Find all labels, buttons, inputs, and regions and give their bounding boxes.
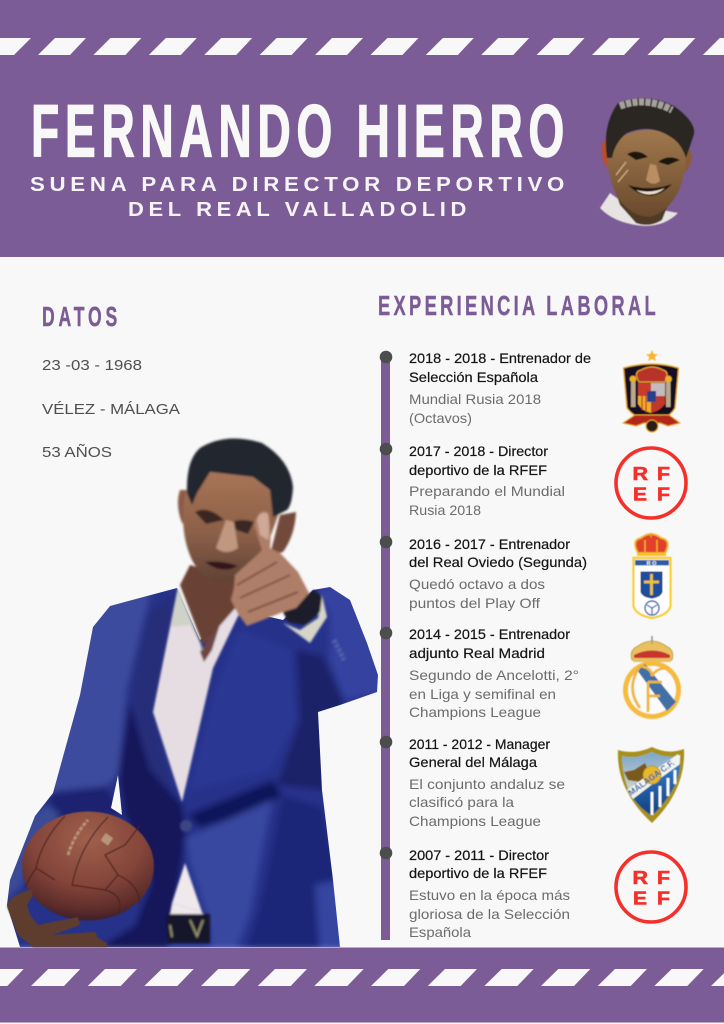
text block: 2007 rfef: gloriosa de la Selección — [409, 906, 570, 922]
icon: rfef logo: F — [657, 888, 670, 908]
ears — [178, 490, 190, 525]
icon: real oviedo crest — [634, 533, 670, 618]
text block: 2007 rfef: Estuvo en la época más — [409, 887, 570, 903]
navy waist — [187, 780, 282, 828]
icon: rfef logo: E — [633, 484, 647, 504]
left sleeve light — [54, 596, 150, 794]
figure: Fernando Hierro with ball — [0, 439, 390, 950]
sleeve buttons — [334, 640, 344, 660]
text block: 2014 real madrid: 2014 - 2015 - Entrenador — [409, 626, 570, 642]
text block: 2016 oviedo: Quedó octavo a dos — [409, 576, 545, 592]
icon: rfef logo — [616, 448, 686, 518]
text block: 2007 rfef — [409, 847, 570, 940]
football — [22, 812, 154, 920]
sleeve underside — [277, 650, 345, 790]
jacket — [0, 580, 390, 950]
icon: rfef logo: E — [633, 888, 647, 908]
text block: 2018 seleccion: Selección Española — [409, 369, 538, 385]
left lapel — [131, 596, 174, 784]
text block: 2014 real madrid: en Liga y semifinal en — [409, 686, 556, 702]
text block: datos: VÉLEZ - MÁLAGA — [42, 401, 180, 418]
text block: 2014 real madrid: Champions League — [409, 704, 541, 720]
text block: 2014 real madrid: adjunto Real Madrid — [409, 645, 545, 661]
text block: 2017 rfef: deportivo de la RFEF — [409, 462, 547, 478]
panel: footer band — [0, 948, 724, 1022]
icon: rfef logo: F — [657, 484, 670, 504]
icon: rfef logo: R — [632, 464, 648, 484]
sleeve dark fold — [48, 786, 125, 820]
watch — [283, 590, 322, 625]
text block: 2007 rfef: Española — [409, 924, 471, 940]
text block: datos: 53 AÑOS — [42, 444, 112, 461]
torso dark — [104, 704, 188, 947]
text block: 2011 malaga: 2011 - 2012 - Manager — [409, 736, 550, 752]
text block: 2016 oviedo: 2016 - 2017 - Entrenador — [409, 536, 570, 552]
belt — [167, 914, 210, 943]
bottom stripe pattern — [0, 969, 724, 986]
text block: 2018 seleccion: (Octavos) — [409, 410, 472, 426]
subtitle: DEL REAL VALLADOLID — [128, 199, 471, 221]
text block: datos: 23 -03 - 1968 — [42, 357, 142, 374]
icon: portrait of Fernando Hierro smiling — [600, 98, 694, 226]
text block: 2017 rfef: Preparando el Mundial — [409, 483, 565, 499]
heading: datos: DATOS — [42, 301, 121, 332]
icon: malaga crest: MÁLAGA C.F. — [626, 758, 676, 798]
icon: rfef logo: F — [657, 868, 670, 888]
jacket flap — [186, 800, 272, 950]
text block: 2011 malaga: El conjunto andaluz se — [409, 776, 565, 792]
text block: 2017 rfef: Rusia 2018 — [409, 502, 481, 518]
text block: 2016 oviedo: puntos del Play Off — [409, 595, 540, 611]
icon: rfef logo: R — [632, 868, 648, 888]
subtitle — [30, 174, 569, 221]
text block: 2011 malaga: clasificó para la — [409, 794, 514, 810]
right panel — [248, 792, 333, 947]
hand — [231, 511, 309, 626]
text block: 2016 oviedo: del Real Oviedo (Segunda) — [409, 554, 587, 570]
icon: malaga crest — [618, 747, 684, 823]
hair — [187, 439, 293, 517]
button — [180, 820, 192, 832]
text block: 2011 malaga: General del Málaga — [409, 754, 537, 770]
text block: 2017 rfef: 2017 - 2018 - Director — [409, 443, 548, 459]
right hem — [312, 878, 340, 947]
icon: spain crest — [623, 350, 680, 432]
icon: rfef logo: F — [657, 464, 670, 484]
icon: rfef logo — [616, 852, 686, 922]
text block: datos — [42, 357, 180, 461]
text block: 2016 oviedo — [409, 536, 587, 611]
icon: real oviedo crest: R O — [647, 561, 657, 567]
text block: 2011 malaga: Champions League — [409, 813, 541, 829]
panel: header band — [0, 0, 724, 257]
text block: 2007 rfef: deportivo de la RFEF — [409, 865, 547, 881]
text block: 2018 seleccion: 2018 - 2018 - Entrenador de — [409, 350, 591, 366]
top stripe pattern — [0, 38, 724, 55]
chest — [195, 634, 292, 786]
icon: real madrid crest — [623, 636, 681, 719]
face — [183, 472, 280, 582]
text block: 2011 malaga — [409, 736, 565, 829]
sleeve cuff — [283, 595, 327, 643]
lower sleeve — [8, 804, 62, 901]
shirt — [153, 587, 240, 802]
upper arm light — [318, 587, 378, 700]
chart: timeline — [380, 351, 392, 940]
text block: 2014 real madrid — [409, 626, 579, 720]
hand on ball — [7, 889, 107, 947]
neck — [180, 565, 240, 645]
subtitle: SUENA PARA DIRECTOR DEPORTIVO — [30, 174, 569, 196]
text block: 2017 rfef — [409, 443, 565, 518]
text block: 2018 seleccion: Mundial Rusia 2018 — [409, 391, 541, 407]
text block: 2007 rfef: 2007 - 2011 - Director — [409, 847, 549, 863]
text block: 2014 real madrid: Segundo de Ancelotti, 2° — [409, 667, 579, 683]
text block: 2018 seleccion — [409, 350, 591, 426]
